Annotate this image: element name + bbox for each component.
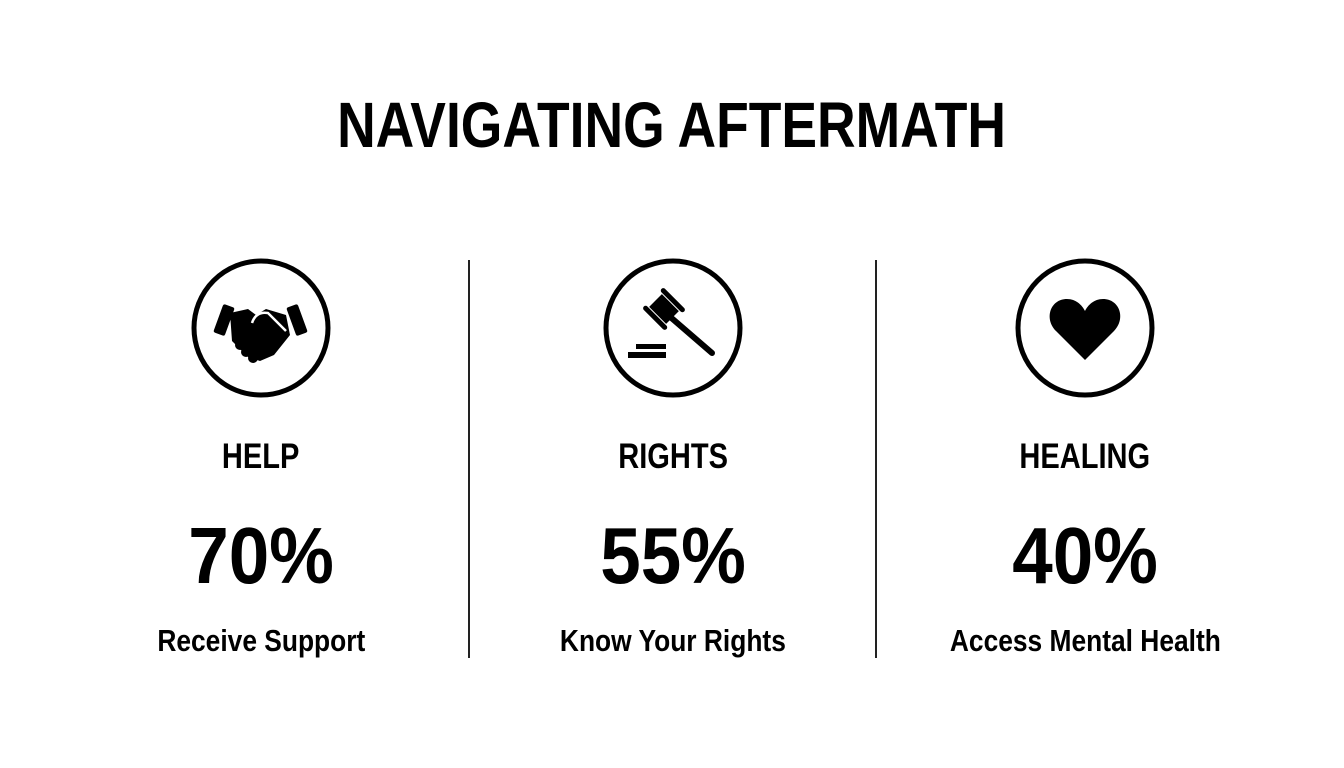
panel: rights [560,258,786,658]
label: Receive Support [157,623,365,658]
title: NAVIGATING AFTERMATH [338,89,1006,161]
heading: HEALING: HEALING [1020,437,1150,476]
icon: gavel [604,258,742,398]
heading: HELP: HELP [222,437,300,476]
icon: heart [1016,258,1154,398]
panel: help [157,258,365,658]
stat: 40%: 40% [1012,511,1158,600]
label: Know Your Rights [560,623,786,658]
panel: healing [950,258,1220,658]
stat: 70%: 70% [188,511,334,600]
label: Access Mental Health [950,623,1220,658]
icon: handshake [192,258,330,398]
heading: RIGHTS: RIGHTS [618,437,728,476]
stat: 55%: 55% [600,511,746,600]
